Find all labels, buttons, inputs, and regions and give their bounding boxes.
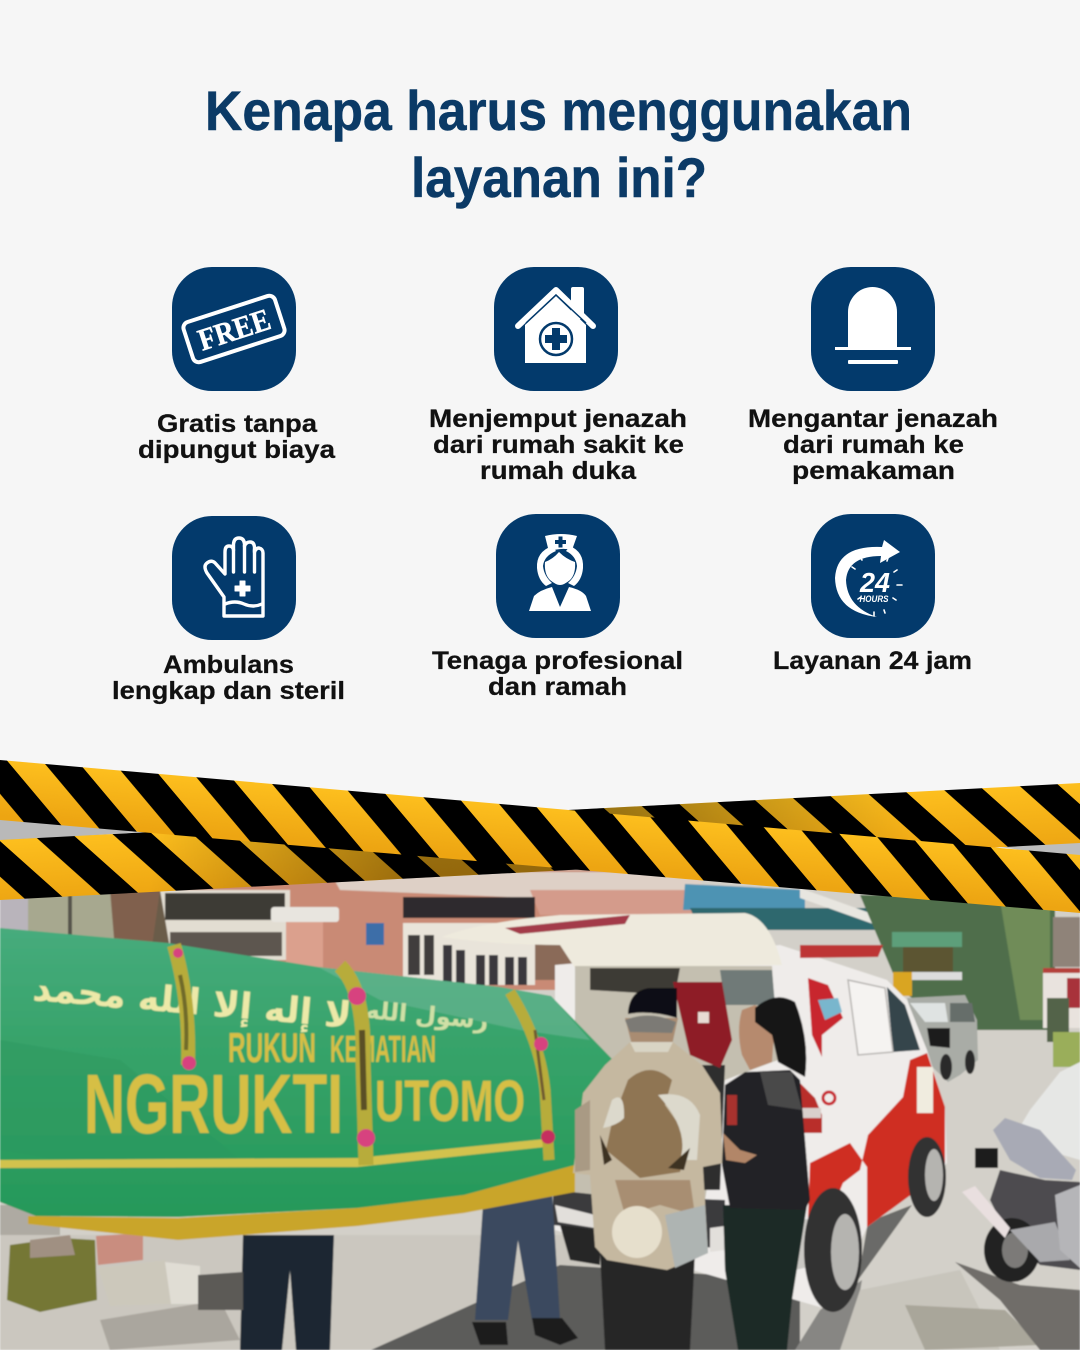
icon: 24 hours clock: 24 — [859, 567, 890, 598]
item: ambulans — [112, 516, 345, 705]
icon: free stamp — [172, 267, 296, 391]
green banner coffin cover — [0, 928, 613, 1240]
icon: nurse — [496, 514, 620, 638]
label: ambulans: Ambulans — [163, 651, 294, 679]
icon: tombstone — [811, 267, 935, 391]
label: menjemput: rumah duka — [480, 457, 637, 485]
motorcycle — [962, 1062, 1080, 1282]
label: ambulans: lengkap dan steril — [112, 677, 345, 705]
label: mengantar: Mengantar jenazah — [748, 405, 998, 433]
label: menjemput: dari rumah sakit ke — [433, 431, 684, 459]
title — [205, 79, 912, 209]
item: menjemput — [429, 267, 687, 485]
item: 24 jam — [773, 514, 972, 675]
icon: 24 hours clock — [811, 514, 935, 638]
icon: glove — [172, 516, 296, 640]
label: mengantar: pemakaman — [792, 457, 955, 485]
grey tape shadow right — [985, 840, 1080, 858]
item: tenaga — [432, 514, 683, 701]
icon: house with medical cross — [494, 267, 618, 391]
green banner coffin cover: رسول الله — [364, 996, 490, 1035]
green banner coffin cover: UTOMO — [375, 1069, 525, 1134]
green banner coffin cover: RUKUN — [228, 1024, 316, 1071]
label: gratis — [138, 410, 336, 464]
label: gratis: dipungut biaya — [138, 436, 336, 464]
title: layanan ini? — [411, 146, 707, 209]
photo: funeral banner and ambulance — [0, 860, 1080, 1350]
hazard tape: front band — [0, 760, 1080, 913]
label: mengantar — [748, 405, 998, 485]
label: gratis: Gratis tanpa — [157, 410, 318, 438]
person: legs centre — [472, 1190, 578, 1345]
label: ambulans — [112, 651, 345, 705]
hazard tape: rear band — [0, 783, 1080, 900]
icon: 24 hours clock: HOURS — [860, 594, 889, 605]
label: menjemput — [429, 405, 687, 485]
person: legs left — [240, 1235, 334, 1350]
label: mengantar: dari rumah ke — [783, 431, 964, 459]
green banner coffin cover: لا إله إلا الله محمد — [31, 968, 353, 1037]
man in black shirt — [722, 997, 810, 1350]
item: mengantar — [748, 267, 998, 485]
label: tenaga: Tenaga profesional — [432, 647, 683, 675]
label: tenaga — [432, 647, 683, 701]
green banner coffin cover: NGRUKTI — [84, 1057, 343, 1151]
ambulance — [442, 913, 950, 1312]
label: 24 jam: Layanan 24 jam — [773, 647, 972, 675]
grey tape shadow left — [0, 818, 140, 842]
label: tenaga: dan ramah — [488, 673, 627, 701]
green banner coffin cover: KEMATIAN — [330, 1029, 436, 1071]
icon: free stamp: FREE — [194, 301, 275, 358]
item: gratis — [138, 267, 336, 464]
label: menjemput: Menjemput jenazah — [429, 405, 687, 433]
road shadows and wet patch — [100, 1205, 1080, 1350]
man in batik shirt — [573, 988, 723, 1350]
photo background and road — [0, 860, 1080, 1350]
title: Kenapa harus menggunakan — [205, 79, 912, 142]
rubble: leaves and curb — [7, 1233, 243, 1312]
